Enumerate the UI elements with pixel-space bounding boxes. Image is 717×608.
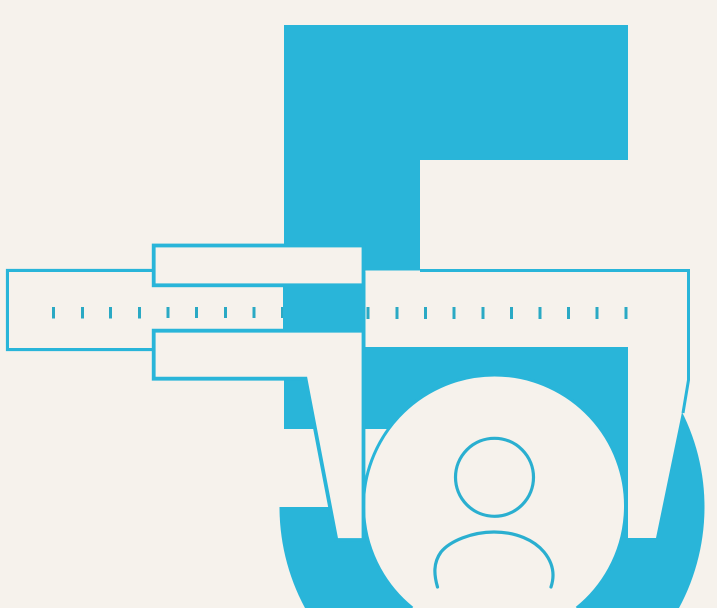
icon: person bbox=[435, 438, 553, 587]
fixed jaw inner edge bbox=[362, 272, 366, 347]
icon: person head bbox=[456, 438, 534, 516]
caliper beam bbox=[8, 270, 152, 350]
caliper sliding upper jaw bbox=[154, 246, 364, 285]
caliper bbox=[8, 246, 688, 540]
circular portrait disc bbox=[364, 375, 626, 608]
scale ticks bbox=[52, 307, 628, 319]
caliper sliding lower jaw bbox=[154, 331, 364, 540]
caliper fixed jaw bbox=[364, 270, 688, 538]
blue gap between the jaws bbox=[283, 287, 363, 329]
icon: person shoulders bbox=[435, 532, 553, 587]
